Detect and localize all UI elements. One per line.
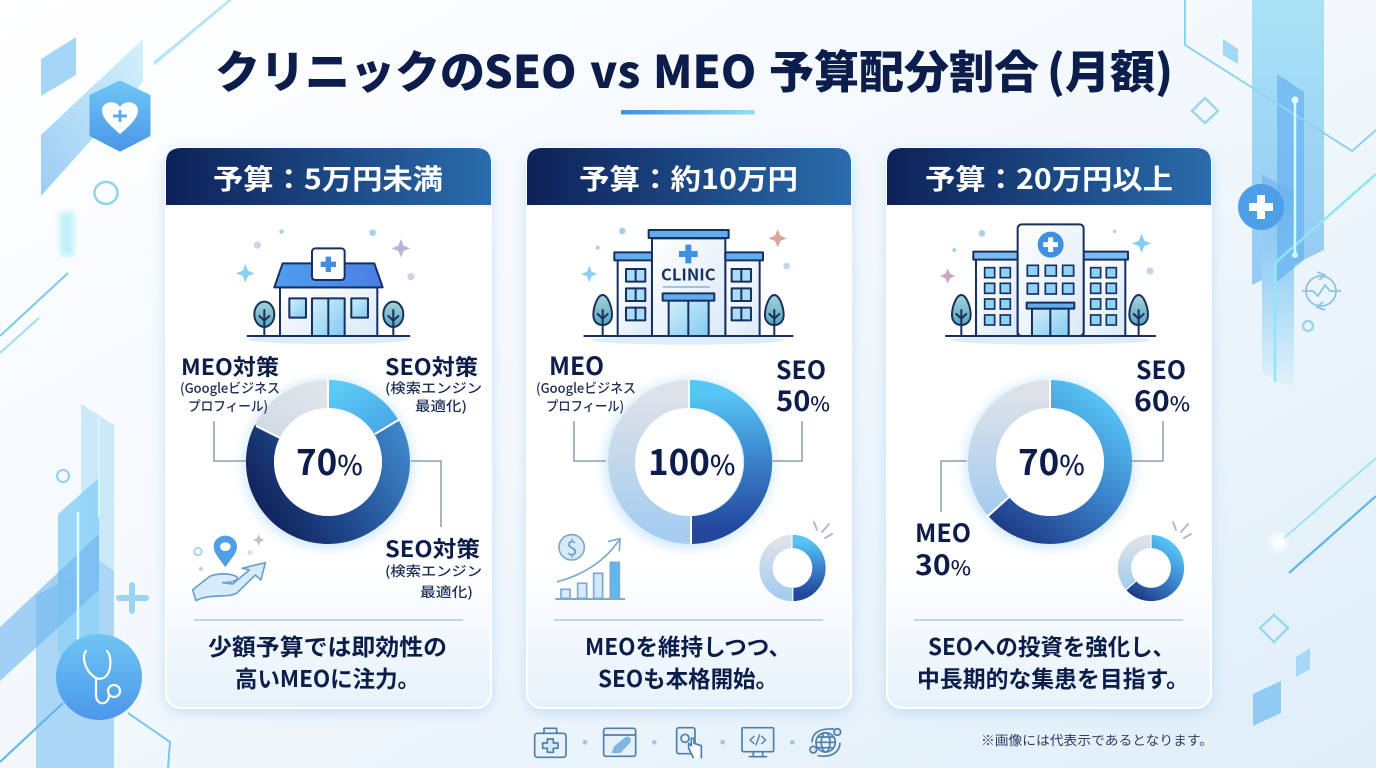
title underline [621,110,755,114]
icon: browser window [604,728,636,756]
label: MEO 30% [915,514,971,584]
icon: cycle chart [1302,272,1341,310]
label: SEO bottom right [385,532,482,601]
icon: plus disc [1238,184,1284,230]
card header [166,148,491,205]
label: MEO top left [180,350,280,415]
diamonds [1192,98,1313,642]
label: MEO 30%: 30% [915,544,971,584]
burst ticks [814,522,832,538]
card body [527,148,851,708]
caption: MEOを維持しつつ、 [585,628,791,662]
label: MEO 30%: MEO [915,514,971,550]
icon: code monitor [742,728,774,757]
caption [208,628,447,694]
label: SEO top right: (検索エンジン [385,377,482,397]
card body [887,148,1211,708]
caption [917,628,1189,694]
label: SEO top right: SEO対策 [385,350,478,382]
label: SEO bottom right: 最適化) [420,581,473,601]
header text: 予算：5万円未満 [213,158,443,198]
small donut [766,534,819,602]
panel: budget over 200k [887,148,1211,708]
title: 予算配分割合 [769,36,1039,101]
caption: SEOへの投資を強化し、 [928,628,1175,662]
divider [554,619,823,621]
caption: SEOも本格開始。 [598,660,778,694]
card header [887,148,1211,205]
title: MEO [653,36,756,101]
icon: medical case [535,728,566,757]
icon: stethoscope disc [56,634,142,720]
donut chart 70% [966,379,1134,548]
label: SEO 60%: SEO [1136,351,1186,387]
card header [527,148,851,205]
left decorative shapes [0,0,232,768]
center value: 70% [296,435,363,486]
icon: phone touch [677,728,701,758]
header text: 予算：約10万円 [579,158,798,198]
label: SEO bottom right: SEO対策 [385,532,480,564]
label: MEO top left: (Googleビジネス [180,377,280,397]
label: SEO 50% [776,351,830,420]
icon: dollar growth chart [555,532,625,599]
label: SEO top right [385,350,482,415]
caption: 高いMEOに注力。 [235,660,420,694]
divider [914,619,1183,621]
panel: budget about 100k [527,148,851,708]
header text: 予算：20万円以上 [925,158,1173,198]
title: クリニックの [215,36,485,101]
leader lines [214,421,441,527]
right decorative shapes [1185,0,1376,726]
title: (月額) [1047,36,1173,101]
label: SEO 60%: 60% [1134,380,1190,420]
label: MEO: プロフィール) [546,395,624,415]
donut chart 70% [244,379,412,548]
clinic building illustration [581,228,793,345]
label: SEO 50%: SEO [776,351,826,387]
donut chart 100% [605,379,773,548]
icon: pin hand arrow [193,534,265,601]
icon: dollar growth chart: $ [566,532,577,561]
card body [166,148,491,708]
label: SEO 50%: 50% [776,380,830,420]
panel: budget under 50k [166,148,491,708]
caption [585,628,791,694]
label: MEO [536,347,636,415]
bottom icon row [535,728,841,758]
clinic small house illustration [236,229,415,344]
label: SEO 60% [1134,351,1190,420]
center value: 100% [648,435,735,486]
label: MEO top left: プロフィール) [188,395,268,415]
label: MEO: MEO [549,347,604,383]
ring accents left [57,182,118,482]
caption: 少額予算では即効性の [208,628,447,662]
icon: globe orbit [810,729,841,756]
leader lines [941,421,1163,512]
title: SEO [484,36,576,101]
label: MEO: (Googleビジネス [536,377,636,397]
label: SEO top right: 最適化) [415,395,467,415]
icon: plus [119,585,146,611]
label: SEO bottom right: (検索エンジン [385,560,482,580]
clinic building illustration: CLINIC [661,262,716,286]
burst ticks [1173,522,1191,538]
label: MEO top left: MEO対策 [181,350,279,382]
title: vs [590,36,640,101]
small donut [1124,534,1178,595]
icon: heart hexagon [91,82,149,150]
hospital building illustration [940,224,1155,345]
leader lines [574,421,802,461]
center value: 70% [1018,435,1085,486]
footnote: ※画像には代表示であるとなります。 [981,730,1213,749]
caption: 中長期的な集患を目指す。 [917,660,1189,694]
divider [194,619,463,621]
